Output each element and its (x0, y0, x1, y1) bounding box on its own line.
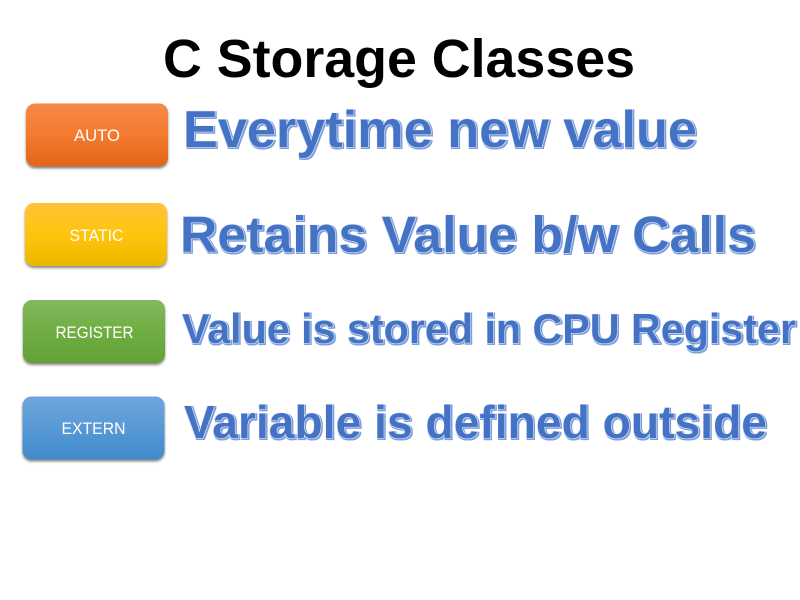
description: STATIC: Retains Value b/w Calls (180, 206, 756, 263)
button: AUTO (26, 104, 168, 166)
button: REGISTER: REGISTER (56, 323, 134, 342)
button: STATIC: STATIC (70, 226, 124, 245)
title: C Storage Classes (163, 29, 635, 89)
button: EXTERN: EXTERN (62, 419, 126, 438)
button: REGISTER (23, 300, 165, 363)
description: AUTO: Everytime new value (183, 101, 697, 159)
button: EXTERN (22, 396, 164, 460)
button: STATIC (25, 203, 167, 266)
description: EXTERN: Variable is defined outside (184, 396, 767, 448)
button: AUTO: AUTO (74, 126, 120, 145)
description: REGISTER: Value is stored in CPU Register (182, 305, 796, 352)
